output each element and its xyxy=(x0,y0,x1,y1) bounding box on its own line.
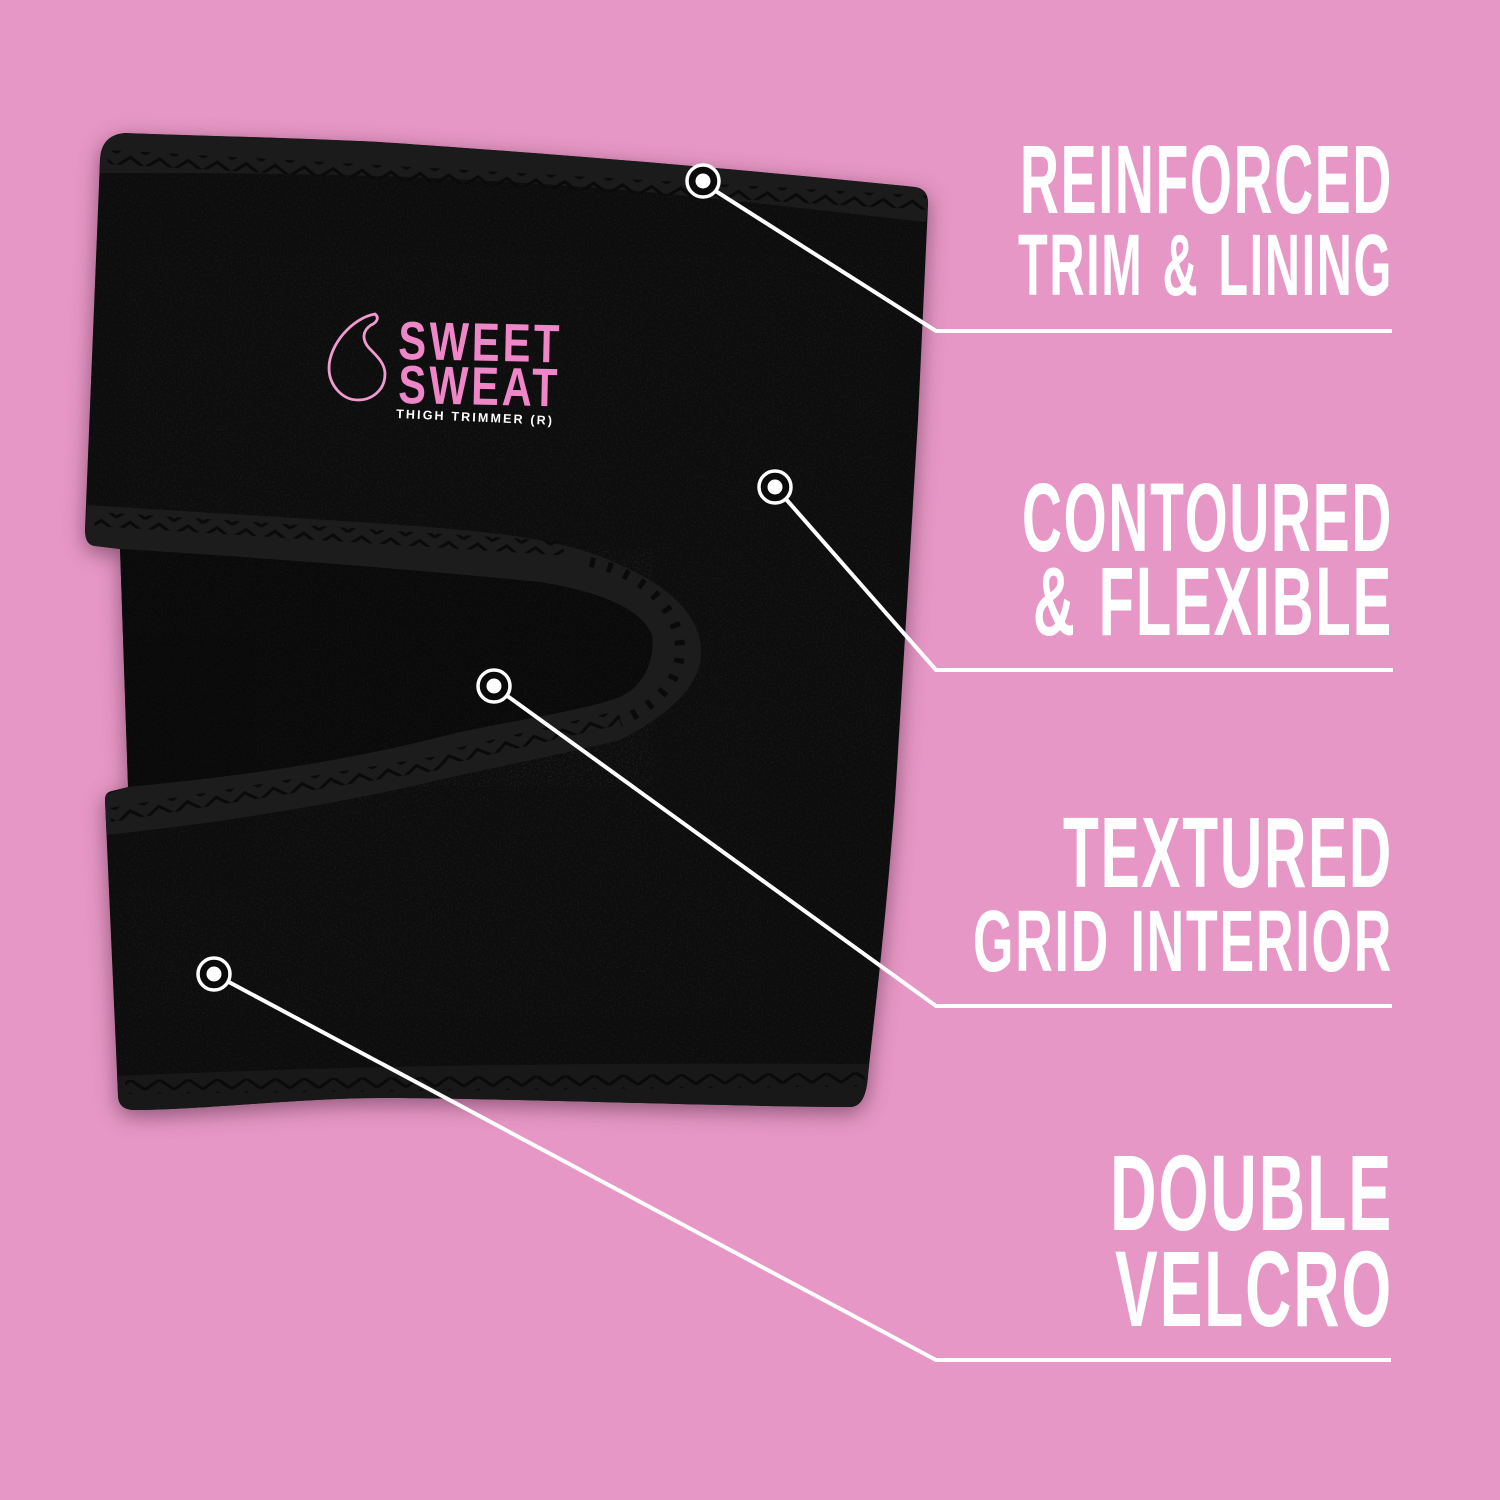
label: reinforced trim and lining xyxy=(1018,125,1393,314)
callout: reinforced trim pointer xyxy=(687,165,1392,331)
logo text: SWEAT: SWEAT xyxy=(398,355,561,418)
callout: contoured pointer xyxy=(759,471,1393,670)
label: textured grid interior xyxy=(973,797,1393,990)
label: double velcro xyxy=(1110,1132,1393,1349)
logo text: SWEET: SWEET xyxy=(398,311,563,374)
callout: double velcro pointer xyxy=(198,958,1391,1360)
logo text: Thigh Trimmer (R): THIGH TRIMMER (R) xyxy=(396,407,552,428)
logo: Sweet Sweat Thigh Trimmer xyxy=(329,311,563,428)
icon: teardrop xyxy=(329,314,385,400)
callout: textured grid pointer xyxy=(478,670,1392,1006)
label: contoured and flexible xyxy=(1022,463,1393,656)
product: thigh trimmer wrap xyxy=(80,125,940,1116)
